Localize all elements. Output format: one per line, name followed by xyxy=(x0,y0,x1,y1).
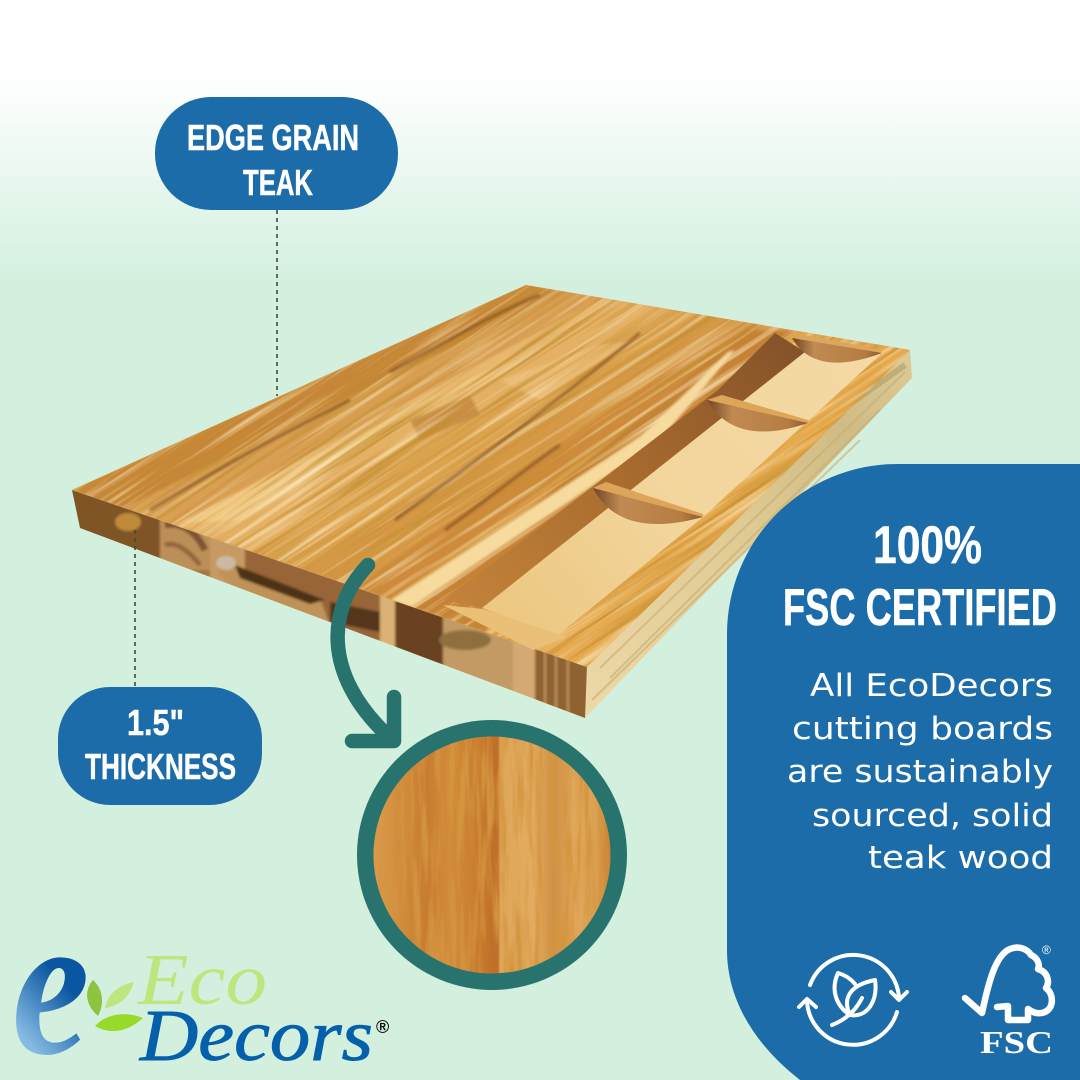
panel body text: All EcoDecors xyxy=(810,668,1053,704)
dotted line: thickness xyxy=(134,530,136,687)
label: edge grain teak xyxy=(155,97,398,210)
panel body text: teak wood xyxy=(868,840,1053,876)
juice groove xyxy=(443,333,882,650)
arrow to close-up xyxy=(338,565,394,741)
icon: FSC logo: FSC xyxy=(980,1024,1053,1060)
panel heading: 100% xyxy=(873,516,982,575)
logo wordmark and leaves xyxy=(87,939,389,1076)
board front end grain xyxy=(72,490,587,718)
label: edge grain teak: EDGE GRAIN xyxy=(187,117,359,158)
dark grain streaks xyxy=(150,295,640,530)
panel heading xyxy=(783,516,1057,637)
back ridge xyxy=(792,335,882,363)
pale sapwood strip xyxy=(391,350,735,607)
logo wordmark and leaves: ® xyxy=(376,1017,389,1037)
label: thickness xyxy=(58,687,262,805)
label: edge grain teak: TEAK xyxy=(243,162,313,203)
label: thickness: THICKNESS xyxy=(85,746,236,787)
logo wordmark and leaves: Decors xyxy=(139,995,373,1076)
icon: FSC logo xyxy=(965,943,1053,1060)
panel: FSC certified xyxy=(727,464,1080,1080)
front ridge xyxy=(593,482,703,524)
cutting board photo xyxy=(60,65,959,849)
grain close-up circle xyxy=(357,720,627,990)
icon: recycling leaf xyxy=(799,955,907,1045)
logo leaves xyxy=(87,980,143,1031)
label: thickness: 1.5" xyxy=(127,702,184,743)
panel body text: are sustainably xyxy=(787,754,1053,790)
logo wordmark and leaves: Eco xyxy=(137,939,267,1020)
panel body text: sourced, solid xyxy=(812,798,1053,834)
dotted line: edge grain xyxy=(276,210,278,396)
panel body text xyxy=(787,668,1053,876)
board right side xyxy=(585,350,912,718)
wood grain texture xyxy=(72,286,909,666)
board top surface xyxy=(72,285,910,667)
panel body text: cutting boards xyxy=(792,711,1053,747)
icon: FSC logo: ® xyxy=(1042,943,1051,957)
middle ridge xyxy=(707,395,808,432)
